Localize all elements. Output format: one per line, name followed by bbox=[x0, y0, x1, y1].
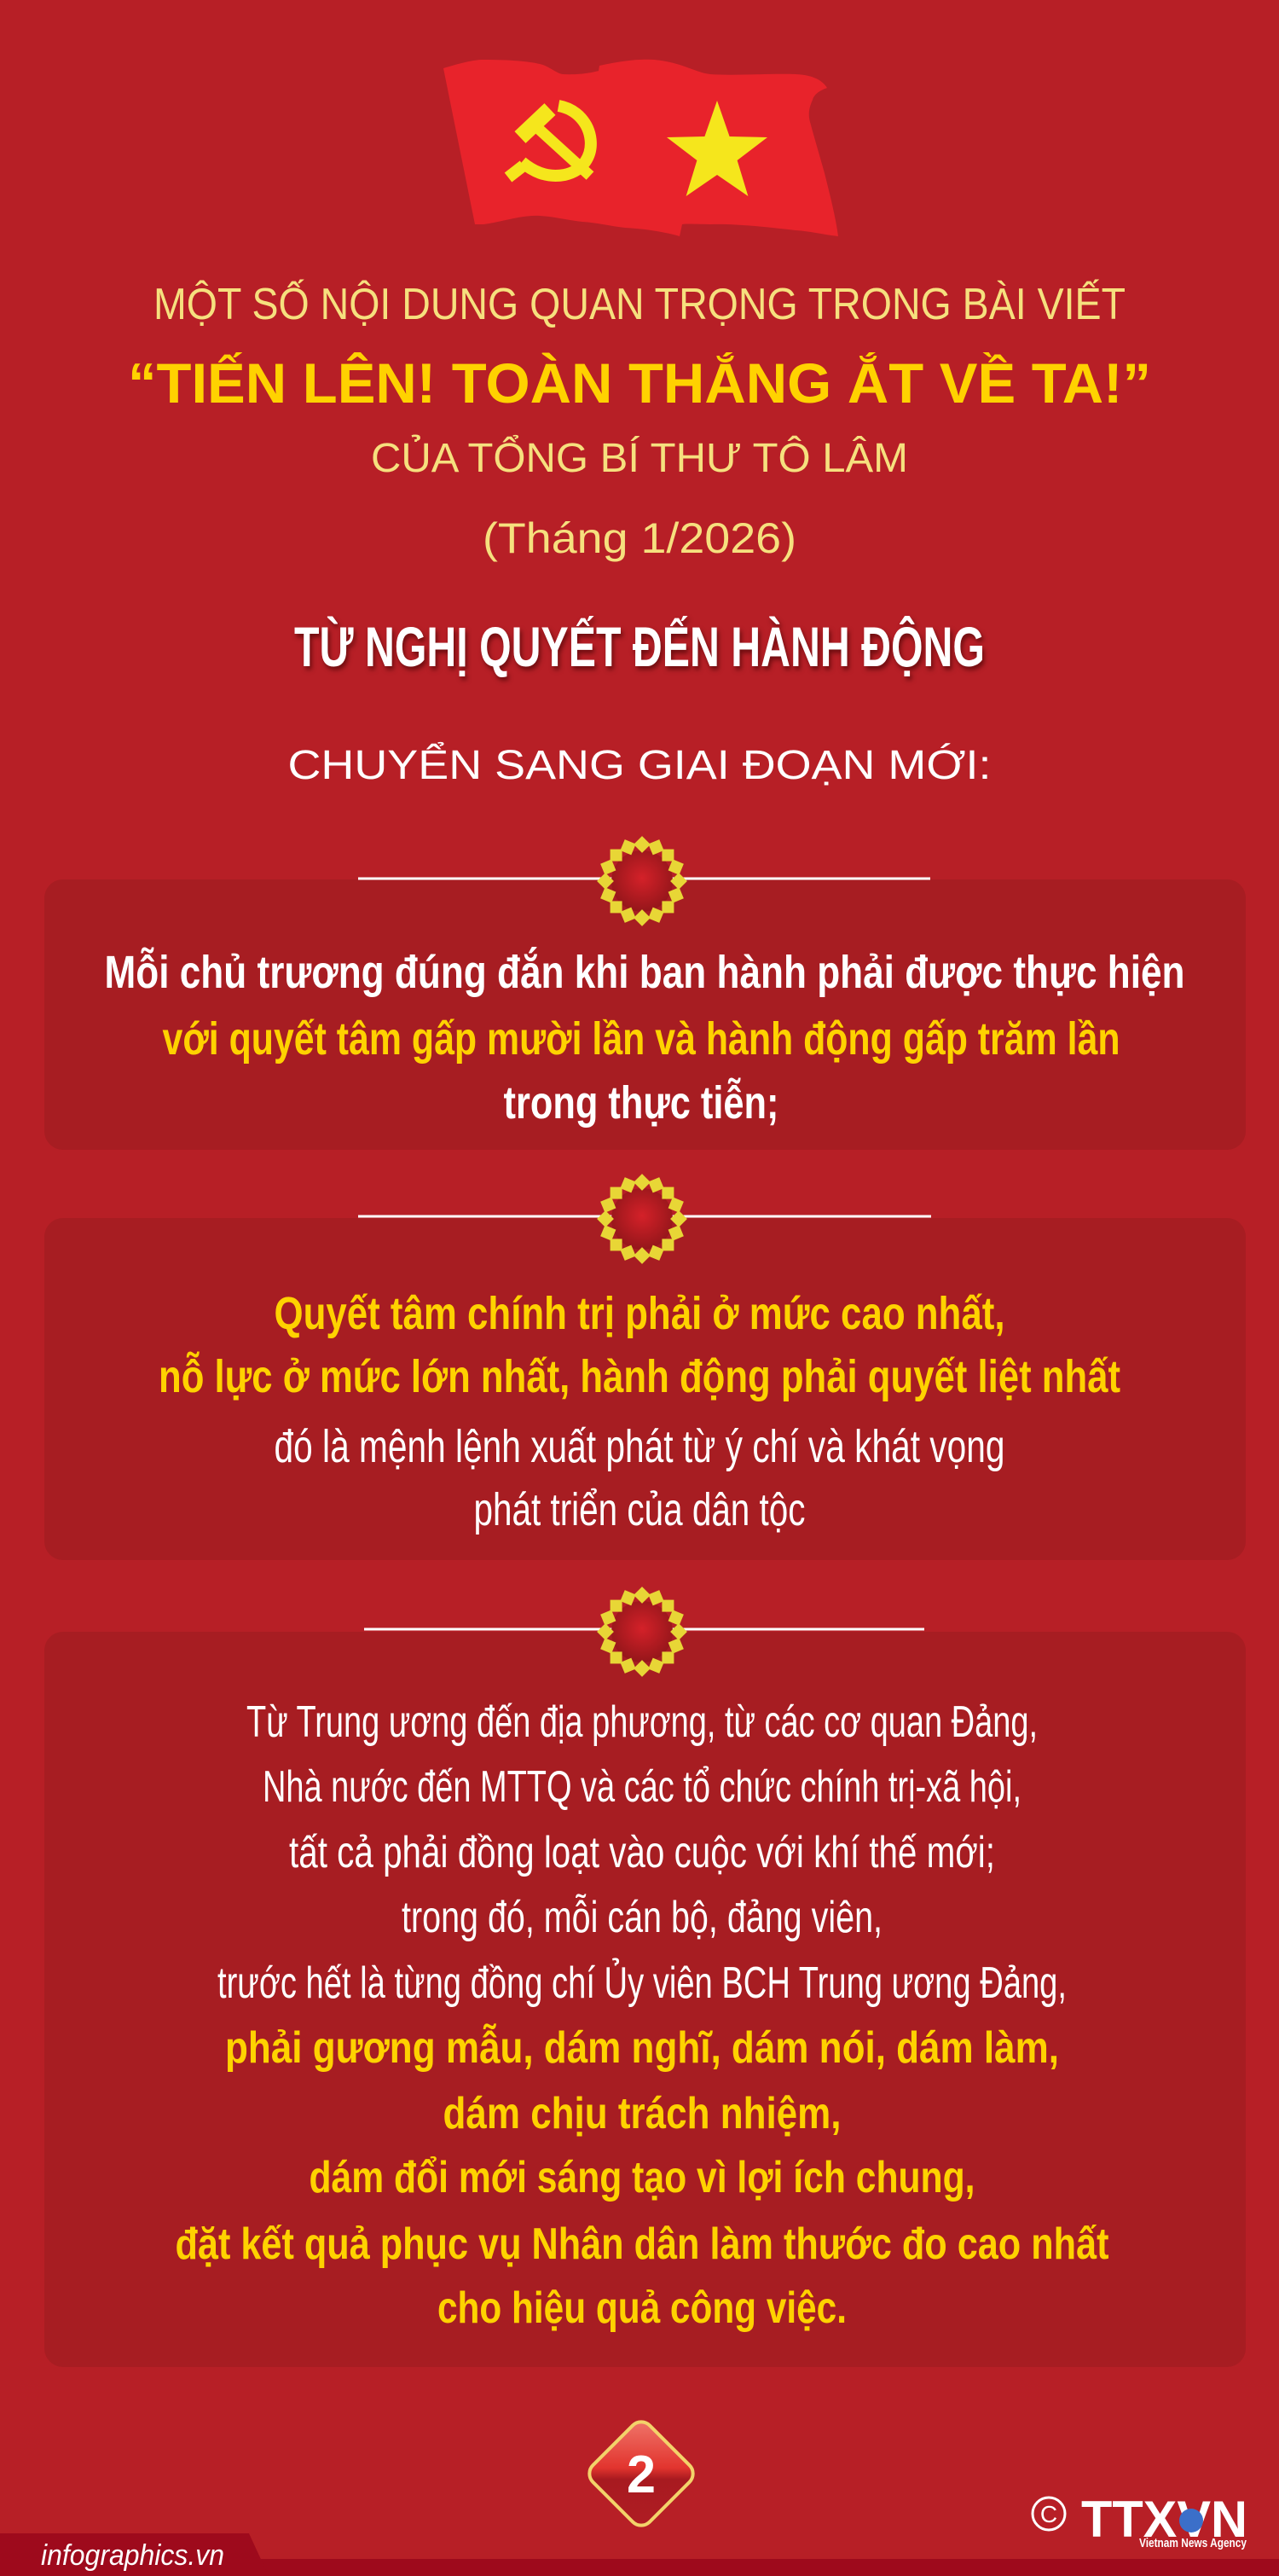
text block 3: cho hiệu quả công việc. bbox=[437, 2283, 847, 2333]
logo: TTXVN: C bbox=[1040, 2501, 1057, 2527]
date: (Tháng 1/2026) bbox=[483, 514, 796, 562]
icon: ornament 1 bbox=[597, 836, 687, 926]
heading: from resolution to action: TỪ NGHỊ QUYẾT ĐẾN HÀNH ĐỘNG bbox=[294, 615, 985, 678]
page number badge bbox=[585, 2417, 697, 2530]
text block 3: tất cả phải đồng loạt vào cuộc với khí thế mới; bbox=[289, 1828, 995, 1877]
subheading: CHUYỂN SANG GIAI ĐOẠN MỚI: bbox=[288, 742, 991, 788]
title bbox=[128, 279, 1151, 481]
text block 2: Quyết tâm chính trị phải ở mức cao nhất, bbox=[275, 1288, 1004, 1339]
footer band bbox=[0, 2559, 1279, 2576]
footer: infographics.vn bbox=[0, 2533, 269, 2576]
footer: infographics.vn: infographics.vn bbox=[41, 2539, 224, 2572]
text block 1: trong thực tiễn; bbox=[503, 1077, 779, 1128]
logo: TTXVN: TTXVN bbox=[1081, 2491, 1247, 2548]
text block 2 bbox=[159, 1288, 1120, 1535]
flag bbox=[443, 60, 838, 236]
text block 2: đó là mệnh lệnh xuất phát từ ý chí và khát vọng bbox=[275, 1421, 1004, 1472]
page number badge: 2 bbox=[627, 2445, 656, 2504]
icon: hammer and sickle bbox=[508, 106, 591, 177]
text block 3: trong đó, mỗi cán bộ, đảng viên, bbox=[402, 1893, 883, 1942]
icon: star bbox=[667, 101, 767, 196]
text block 1 bbox=[104, 947, 1185, 1128]
text block 3: Nhà nước đến MTTQ và các tổ chức chính trị-xã hội, bbox=[263, 1762, 1021, 1812]
text block 3: phải gương mẫu, dám nghĩ, dám nói, dám làm, bbox=[225, 2023, 1059, 2073]
text block 2: phát triển của dân tộc bbox=[474, 1484, 805, 1535]
text block 3 bbox=[176, 1697, 1108, 2333]
icon: ornament 3 bbox=[597, 1587, 687, 1677]
text block 3: dám chịu trách nhiệm, bbox=[443, 2089, 841, 2138]
text block 3: đặt kết quả phục vụ Nhân dân làm thước đo cao nhất bbox=[176, 2219, 1108, 2269]
panel: point 2 bbox=[44, 1174, 1246, 1560]
panel: point 3 bbox=[44, 1587, 1246, 2367]
title: CỦA TỔNG BÍ THƯ TÔ LÂM bbox=[371, 434, 908, 481]
panel: point 1 bbox=[44, 836, 1246, 1150]
title: MỘT SỐ NỘI DUNG QUAN TRỌNG TRONG BÀI VIẾT bbox=[153, 279, 1126, 329]
logo: TTXVN: Vietnam News Agency bbox=[1139, 2536, 1247, 2550]
icon: ornament 2 bbox=[597, 1174, 687, 1264]
text block 3: dám đổi mới sáng tạo vì lợi ích chung, bbox=[309, 2153, 975, 2202]
title: “TIẾN LÊN! TOÀN THẮNG ẮT VỀ TA!” bbox=[128, 351, 1151, 415]
